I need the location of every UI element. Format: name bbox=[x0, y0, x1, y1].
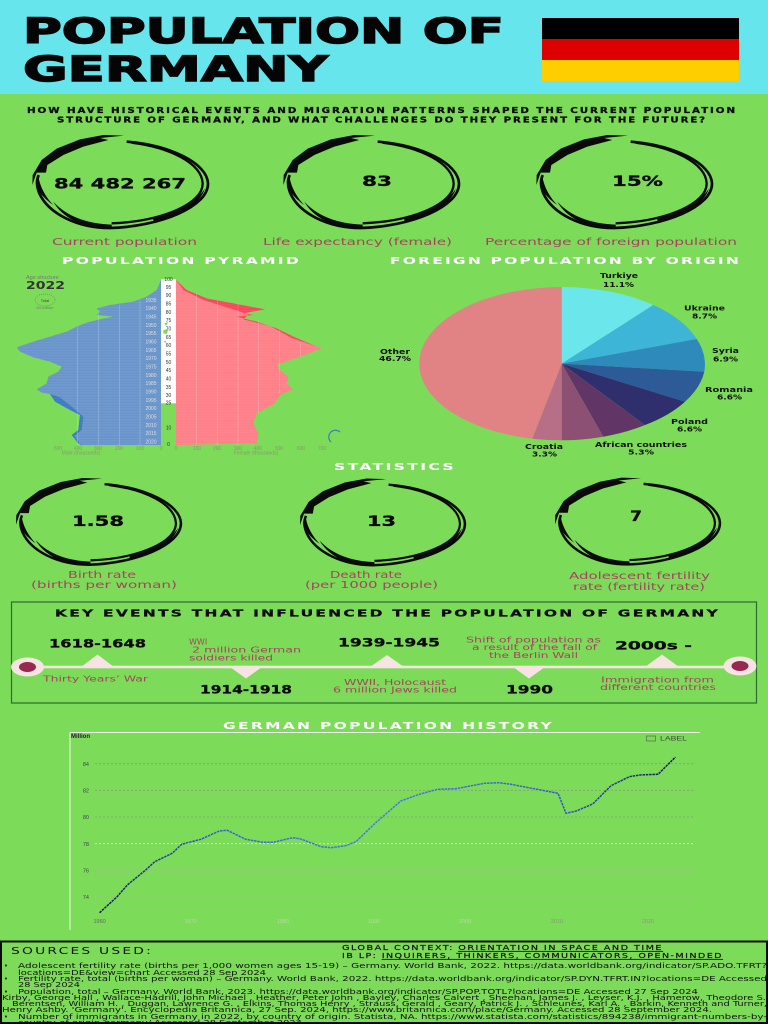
stat: birth rate: Birth rate bbox=[68, 570, 136, 581]
age axis labels bbox=[164, 277, 173, 448]
source list: Population, total – Germany. World Bank, 2023. https://data.worldbank.org/indicator/SP.POP.TOTL?locations=DE Accessed 27 Sep 2024 bbox=[18, 988, 698, 996]
pie labels: 8.7% bbox=[692, 312, 717, 320]
y axis labels: 76 bbox=[83, 868, 89, 874]
age axis labels: 85 bbox=[166, 302, 171, 308]
pyramid year caption: Total bbox=[41, 298, 49, 303]
stat: current population: 84 482 267 bbox=[54, 176, 186, 192]
global context: GLOBAL CONTEXT: ORIENTATION IN SPACE AND TIME bbox=[342, 944, 663, 952]
pie labels bbox=[379, 271, 753, 458]
y axis labels: 84 bbox=[83, 762, 89, 768]
x axis labels bbox=[93, 919, 654, 925]
thousands axis labels: 100 bbox=[136, 446, 144, 452]
age axis labels: 70 bbox=[166, 326, 171, 332]
y axis labels: 78 bbox=[83, 842, 89, 848]
title bbox=[23, 12, 504, 90]
thousands axis labels: 700 bbox=[318, 446, 326, 452]
stat: birth rate: (births per woman) bbox=[31, 580, 177, 591]
heading: foreign population by origin: FOREIGN POPULATION BY ORIGIN bbox=[390, 256, 741, 267]
birth year labels: 1935 bbox=[145, 298, 157, 304]
age axis labels: 100 bbox=[164, 277, 173, 283]
stat: death rate: (per 1000 people) bbox=[305, 580, 438, 591]
title: GERMANY bbox=[23, 50, 329, 90]
source list: • bbox=[4, 1013, 8, 1021]
y axis labels: 82 bbox=[83, 788, 89, 794]
stat: adolescent fertility: rate (fertility rate) bbox=[573, 582, 705, 593]
chart: foreign population pie bbox=[379, 271, 753, 458]
stat: death rate: 13 bbox=[367, 514, 396, 530]
event: WWII bbox=[333, 636, 457, 694]
stat: birth rate: 1.58 bbox=[72, 514, 124, 530]
icon: German flag bbox=[542, 18, 739, 81]
stat: adolescent fertility: 7 bbox=[630, 509, 642, 525]
age axis labels: 45 bbox=[166, 368, 171, 374]
stat: life expectancy: Life expectancy (female) bbox=[263, 237, 452, 248]
birth year labels: 1985 bbox=[145, 381, 157, 387]
stat: adolescent fertility: Adolescent fertility bbox=[569, 571, 711, 582]
birth year labels: 1995 bbox=[145, 398, 157, 404]
source list: Henry Ashby. 'Germany'. Encyclopedia Britannica, 27 Sep. 2024, https://www.britannica.com/place/Germany. Accessed 28 September 2024. bbox=[2, 1006, 712, 1014]
event: WWI: soldiers killed bbox=[189, 654, 273, 662]
event: WWI: WWI bbox=[189, 638, 207, 646]
event: thirty years war: 1618-1648 bbox=[49, 636, 146, 650]
pie labels: Other bbox=[380, 347, 411, 356]
x axis labels: 2000 bbox=[459, 919, 471, 925]
vertical gridlines bbox=[77, 293, 301, 445]
source list: • bbox=[4, 988, 8, 996]
birth year labels: 1950 bbox=[145, 323, 157, 329]
panel: key events timeline bbox=[11, 602, 756, 703]
pie labels: African countries bbox=[595, 440, 687, 449]
age axis labels: 90 bbox=[166, 293, 171, 299]
event: 2000s immigration bbox=[600, 638, 716, 692]
birth year labels: 1990 bbox=[145, 390, 157, 396]
event: thirty years war bbox=[41, 636, 149, 684]
stat: life expectancy: 83 bbox=[362, 174, 392, 190]
pie labels: 46.7% bbox=[379, 354, 411, 363]
chart: population history line bbox=[70, 732, 700, 930]
source list: Fertility rate, total (births per woman) – Germany. World Bank, 2022. https://data.worldbank.org/indicator/SP.DYN.TFRT.IN?locations=DE Accessed bbox=[18, 975, 767, 983]
thousands axis labels: Female (thousands) bbox=[234, 450, 279, 456]
birth year labels: 1940 bbox=[145, 306, 157, 312]
pie labels: 5.3% bbox=[628, 448, 654, 456]
research question bbox=[27, 106, 737, 124]
x axis labels: 1960 bbox=[93, 919, 106, 925]
thousands axis labels: 0 bbox=[160, 446, 163, 452]
age axis labels: 80 bbox=[166, 310, 171, 316]
stat: foreign population share bbox=[485, 135, 737, 248]
birth year labels: 2015 bbox=[145, 431, 157, 437]
birth year labels: 2005 bbox=[145, 414, 157, 420]
y axis labels bbox=[83, 762, 89, 901]
birth year labels: 1965 bbox=[145, 348, 157, 354]
population line bbox=[100, 757, 676, 913]
panel: sources bbox=[0, 942, 768, 1024]
pie labels: 3.3% bbox=[532, 450, 557, 458]
x axis labels: 2020 bbox=[642, 919, 654, 925]
thousands axis labels: 300 bbox=[94, 446, 102, 452]
stat: foreign population share: 15% bbox=[612, 174, 664, 190]
birth year labels: 1970 bbox=[145, 356, 157, 362]
thousands axis labels: 200 bbox=[213, 446, 221, 452]
stat: birth rate bbox=[16, 478, 181, 591]
birth year labels: 1980 bbox=[145, 373, 157, 379]
stat: death rate bbox=[300, 478, 465, 591]
stat: current population bbox=[32, 135, 208, 248]
age axis labels: 30 bbox=[166, 393, 171, 399]
heading: German population history: GERMAN POPULATION HISTORY bbox=[223, 721, 554, 732]
pie labels: Turkiye bbox=[600, 271, 638, 280]
gridlines bbox=[95, 764, 693, 897]
pie labels: Syria bbox=[712, 346, 739, 355]
pie labels: 6.6% bbox=[717, 392, 742, 402]
thousands axis labels: 600 bbox=[297, 446, 305, 452]
age axis labels: 0 bbox=[167, 442, 170, 448]
event: 2000s immigration: Immigration from bbox=[601, 676, 714, 684]
axis unit: Million bbox=[71, 734, 90, 740]
chart: population pyramid bbox=[17, 275, 340, 456]
age axis labels: 50 bbox=[166, 360, 171, 366]
stat: foreign population share: Percentage of foreign population bbox=[485, 237, 737, 248]
header banner bbox=[0, 0, 768, 94]
event: fall of the Berlin Wall: a result of the fall of bbox=[472, 643, 597, 652]
birth year labels bbox=[145, 298, 157, 446]
stat: adolescent fertility bbox=[555, 478, 720, 593]
birth year labels: 2000 bbox=[145, 406, 157, 412]
stat: current population: Current population bbox=[52, 237, 197, 248]
timeline end marker bbox=[724, 656, 756, 676]
timeline start marker bbox=[11, 658, 44, 676]
loading arc icon bbox=[329, 430, 340, 442]
age axis labels: 95 bbox=[166, 285, 171, 291]
age axis labels: 40 bbox=[166, 376, 171, 382]
birth year labels: 2020 bbox=[145, 440, 157, 446]
heading: statistics: STATISTICS bbox=[334, 462, 456, 473]
pie labels: 6.9% bbox=[713, 354, 738, 364]
birth year labels: 1960 bbox=[145, 340, 157, 346]
event: thirty years war: Thirty Years’ War bbox=[41, 674, 149, 684]
male population bars bbox=[17, 280, 161, 445]
pie labels: 6.6% bbox=[677, 424, 702, 434]
birth year labels: 1955 bbox=[145, 331, 157, 337]
thousands axis labels: 500 bbox=[54, 446, 62, 452]
pie labels: Poland bbox=[671, 417, 708, 426]
research question: STRUCTURE OF GERMANY, AND WHAT CHALLENGES DO THEY PRESENT FOR THE FUTURE? bbox=[57, 116, 707, 124]
pyramid year caption: 84 million bbox=[37, 305, 53, 310]
thousands axis labels: Male (thousands) bbox=[62, 450, 101, 456]
birth year labels: 1975 bbox=[145, 364, 157, 370]
stat: life expectancy bbox=[263, 135, 459, 248]
thousands axis labels: 100 bbox=[193, 446, 201, 452]
research question: HOW HAVE HISTORICAL EVENTS AND MIGRATION PATTERNS SHAPED THE CURRENT POPULATION bbox=[27, 106, 737, 115]
source list: • bbox=[4, 962, 8, 970]
thousands axis labels: 200 bbox=[115, 446, 123, 452]
birth year labels: 1945 bbox=[145, 314, 157, 320]
pie labels: Ukraine bbox=[684, 304, 725, 312]
thousands axis labels: 400 bbox=[254, 446, 262, 452]
event: fall of the Berlin Wall: the Berlin Wall bbox=[489, 651, 578, 660]
event: 2000s immigration: different countries bbox=[600, 683, 716, 692]
thousands axis labels: 400 bbox=[74, 446, 82, 452]
pie slices bbox=[419, 287, 705, 440]
source list: • bbox=[4, 975, 8, 983]
age axis labels: 55 bbox=[166, 352, 171, 358]
y axis labels: 80 bbox=[83, 815, 89, 821]
source list bbox=[2, 962, 768, 1024]
age axis labels: 25 bbox=[166, 400, 171, 406]
x axis labels: 2010 bbox=[551, 919, 563, 925]
legend: LABEL bbox=[660, 736, 688, 742]
timeline heading: KEY EVENTS THAT INFLUENCED THE POPULATION OF GERMANY bbox=[55, 608, 720, 620]
event: WWII: 6 million Jews killed bbox=[333, 686, 457, 694]
event: WWII: 1939-1945 bbox=[338, 636, 440, 650]
source list: Kirby, George Hall , Wallace-Hadrill, John Michael , Heather, Peter John , Bayley, Charles Calvert , Sheehan, James J. , Leyser, K.J. , Hamerow, Theodore S. bbox=[2, 994, 766, 1002]
x axis labels: 1990 bbox=[368, 919, 380, 925]
global context bbox=[342, 944, 723, 960]
source list: Berentsen, William H. , Duggan, Lawrence G. , Elkins, Thomas Henry , Strauss, Gerald , Geary, Patrick J. , Schleunes, Karl A. , Barkin, Kenneth and Turner, bbox=[12, 1000, 767, 1008]
event: WWII: WWII, Holocaust bbox=[344, 678, 446, 687]
female population bars bbox=[176, 280, 322, 445]
source list: Number of immigrants in Germany in 2022, by country of origin. Statista, NA. https://www.statista.com/statistics/894238/immigrant-numbers-by- bbox=[18, 1013, 768, 1021]
thousands axis labels: 500 bbox=[275, 446, 283, 452]
age axis labels: 75 bbox=[166, 318, 171, 324]
age axis labels: 65 bbox=[166, 335, 171, 341]
event: WWI: 2 million German bbox=[192, 646, 301, 654]
title: POPULATION OF bbox=[23, 12, 504, 52]
age axis labels: 35 bbox=[166, 385, 171, 391]
pyramid year caption: Age structure bbox=[26, 275, 59, 281]
event: fall of the Berlin Wall bbox=[466, 636, 601, 696]
thousands axis labels: 300 bbox=[234, 446, 242, 452]
sources heading: SOURCES USED: bbox=[11, 946, 153, 957]
white age strip bbox=[161, 279, 176, 403]
pie labels: 11.1% bbox=[603, 280, 634, 289]
thousands axis labels: 0 bbox=[175, 446, 178, 452]
event: WWI: 1914-1918 bbox=[200, 682, 292, 696]
thousands axis labels bbox=[54, 446, 326, 456]
pie labels: Romania bbox=[705, 385, 753, 394]
x axis labels: 1980 bbox=[277, 919, 289, 925]
birth year labels: 2010 bbox=[145, 423, 157, 429]
timeline axis bbox=[28, 654, 740, 678]
source list: locations=DE&view=chart Accessed 28 Sep 2024 bbox=[18, 969, 266, 977]
age axis labels: 10 bbox=[166, 426, 171, 432]
source list: 28 Sep 2024 bbox=[18, 981, 80, 989]
y axis labels: 74 bbox=[83, 895, 89, 901]
age axis labels: 60 bbox=[166, 343, 171, 349]
event: 2000s immigration: 2000s - bbox=[615, 638, 692, 652]
stat: death rate: Death rate bbox=[330, 570, 402, 581]
heading: population pyramid: POPULATION PYRAMID bbox=[62, 256, 301, 267]
event: fall of the Berlin Wall: 1990 bbox=[506, 682, 553, 696]
global context: IB LP: INQUIRERS, THINKERS, COMMUNICATORS, OPEN-MINDED bbox=[342, 952, 723, 960]
event: WWI bbox=[189, 638, 301, 696]
source list: Adolescent fertility rate (births per 1,000 women ages 15-19) – Germany. World Bank, 2022. https://data.worldbank.org/indicator/SP.ADO.TFRT? bbox=[18, 962, 768, 970]
pie labels: Croatia bbox=[525, 442, 563, 451]
event: fall of the Berlin Wall: Shift of population as bbox=[466, 636, 601, 644]
x axis labels: 1970 bbox=[184, 919, 197, 925]
pyramid year caption bbox=[26, 275, 65, 310]
legend bbox=[646, 736, 688, 742]
pyramid year caption: 2022 bbox=[26, 279, 65, 292]
